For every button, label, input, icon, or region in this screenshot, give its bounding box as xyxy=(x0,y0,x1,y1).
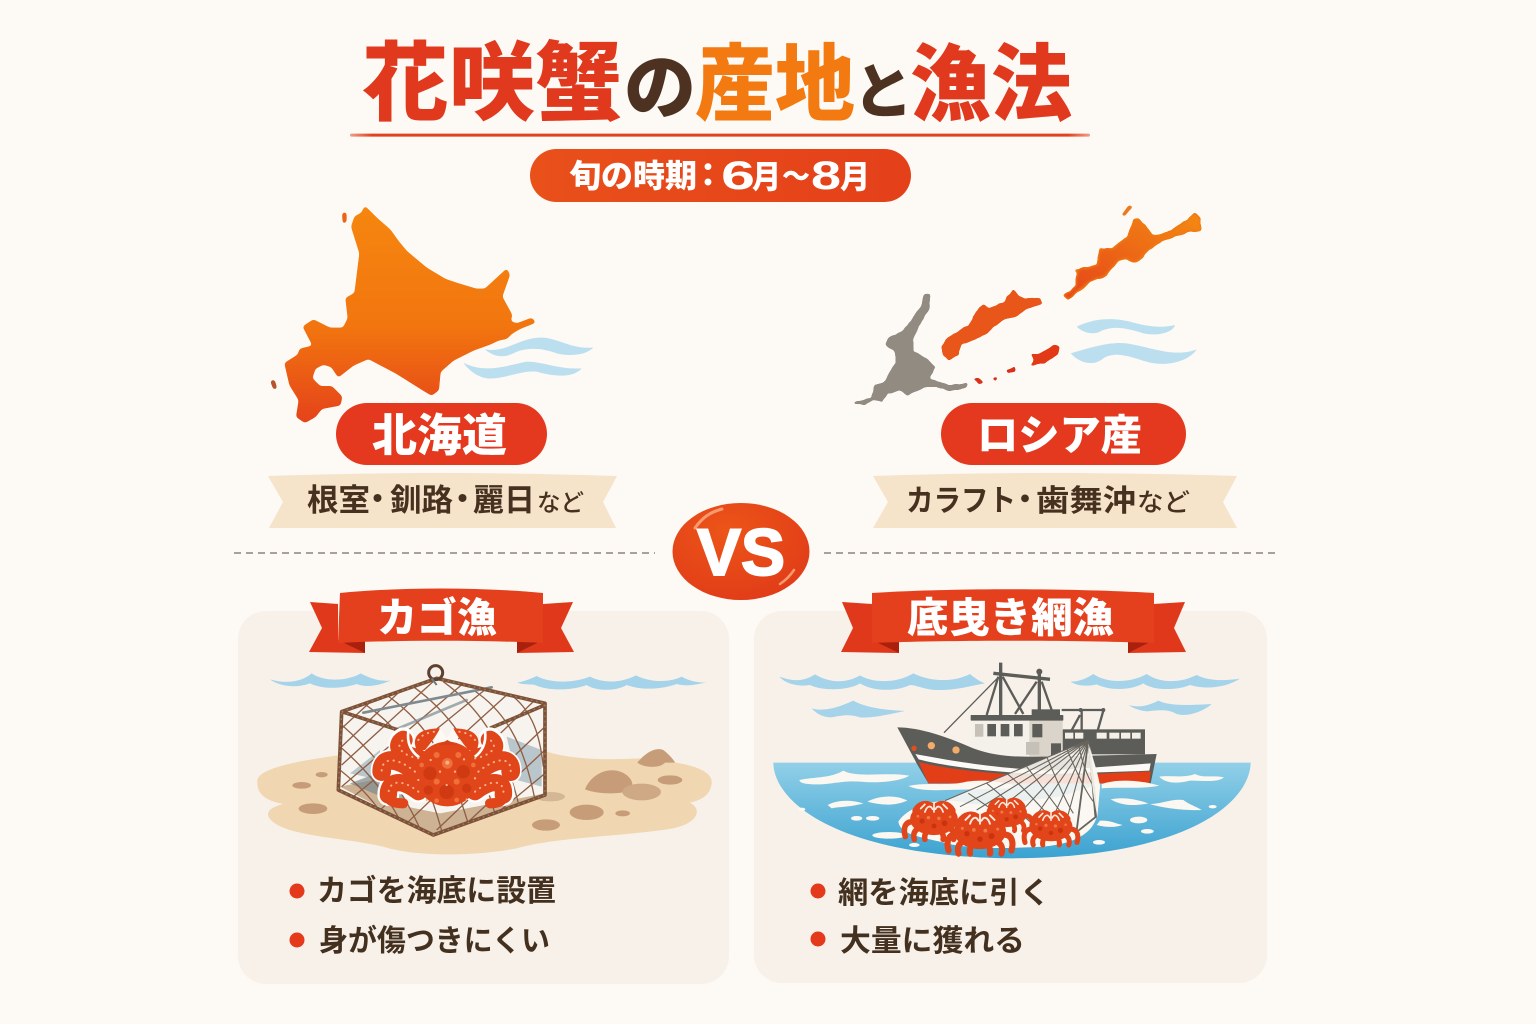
banner: Hokkaido areas: ・ xyxy=(362,482,393,517)
VS badge: VS xyxy=(697,515,785,589)
icon: waves near Russian islands xyxy=(1071,319,1197,364)
season pill: 〜 xyxy=(782,161,810,192)
title: 漁法 xyxy=(910,38,1072,132)
crab xyxy=(382,728,511,806)
season pill: ： xyxy=(692,157,724,193)
title underline xyxy=(350,134,1090,137)
illustration: crab in basket on the seabed xyxy=(257,666,712,854)
catch area xyxy=(898,783,1100,848)
season pill: 月 xyxy=(752,159,781,195)
illustration: trawler with net xyxy=(773,663,1251,858)
net xyxy=(945,740,1096,831)
rocks xyxy=(292,749,682,831)
foam xyxy=(798,740,1224,848)
bullet list: trawl fishing: 網を海底に引く xyxy=(838,877,1050,910)
bullet list: trawl fishing xyxy=(810,877,1050,958)
title: と xyxy=(853,59,913,126)
banner: Russian areas: 歯舞沖 xyxy=(1036,485,1136,518)
ribbon: basket fishing heading xyxy=(309,588,574,653)
season pill: 6 xyxy=(721,154,755,198)
title: 産地 xyxy=(695,38,855,132)
basket with netting xyxy=(338,666,545,837)
map: Hokkaido xyxy=(270,207,535,422)
label: Hokkaido pill xyxy=(336,403,547,465)
title xyxy=(362,36,1072,132)
season pill: 旬の時期 xyxy=(569,158,697,194)
panel: basket fishing xyxy=(238,588,729,984)
icon: waves near Hokkaido xyxy=(463,338,593,379)
basket hanging ring xyxy=(429,666,443,680)
ribbon: trawl heading xyxy=(841,589,1186,653)
bullet list: trawl fishing: 大量に獲れる xyxy=(840,925,1025,958)
ribbon: basket fishing heading: カゴ漁 xyxy=(377,595,497,641)
banner: Russian areas: ・ xyxy=(1010,484,1040,517)
banner: Hokkaido areas: 根室 xyxy=(307,483,370,518)
VS badge xyxy=(672,503,810,600)
season pill: 月 xyxy=(840,159,870,195)
banner: Hokkaido areas: ・ xyxy=(447,482,478,517)
basket rope frame xyxy=(338,678,545,835)
label: Russia pill xyxy=(941,403,1186,465)
title: 花咲蟹 xyxy=(362,36,622,132)
sand mound xyxy=(257,752,712,854)
water surface waves xyxy=(270,673,706,690)
bullet list: basket fishing: カゴを海底に設置 xyxy=(317,874,556,908)
season pill: 8 xyxy=(811,154,841,198)
ribbon: trawl heading: 底曳き網漁 xyxy=(907,595,1114,641)
sky waves xyxy=(779,673,1240,717)
label: Russia pill: ロシア産 xyxy=(977,412,1142,459)
map: Russian waters xyxy=(855,205,1201,405)
banner: Russian areas xyxy=(873,473,1237,528)
season pill xyxy=(530,149,911,202)
trawler xyxy=(897,663,1157,783)
crabs in the net xyxy=(904,799,1078,854)
banner: Hokkaido areas: 釧路 xyxy=(390,483,453,518)
sea xyxy=(773,763,1251,858)
banner: Hokkaido areas: 麗日 xyxy=(473,483,535,518)
banner: Hokkaido areas: など xyxy=(537,490,584,517)
banner: Hokkaido areas xyxy=(268,473,617,528)
panel: bottom trawl fishing xyxy=(754,589,1267,983)
label: Hokkaido pill: 北海道 xyxy=(372,410,507,461)
banner: Russian areas: カラフト xyxy=(906,485,1016,518)
banner: Russian areas: など xyxy=(1137,489,1190,517)
bullet list: basket fishing: 身が傷つきにくい xyxy=(319,924,550,958)
title: の xyxy=(624,49,696,129)
bullet list: basket fishing xyxy=(290,874,556,958)
